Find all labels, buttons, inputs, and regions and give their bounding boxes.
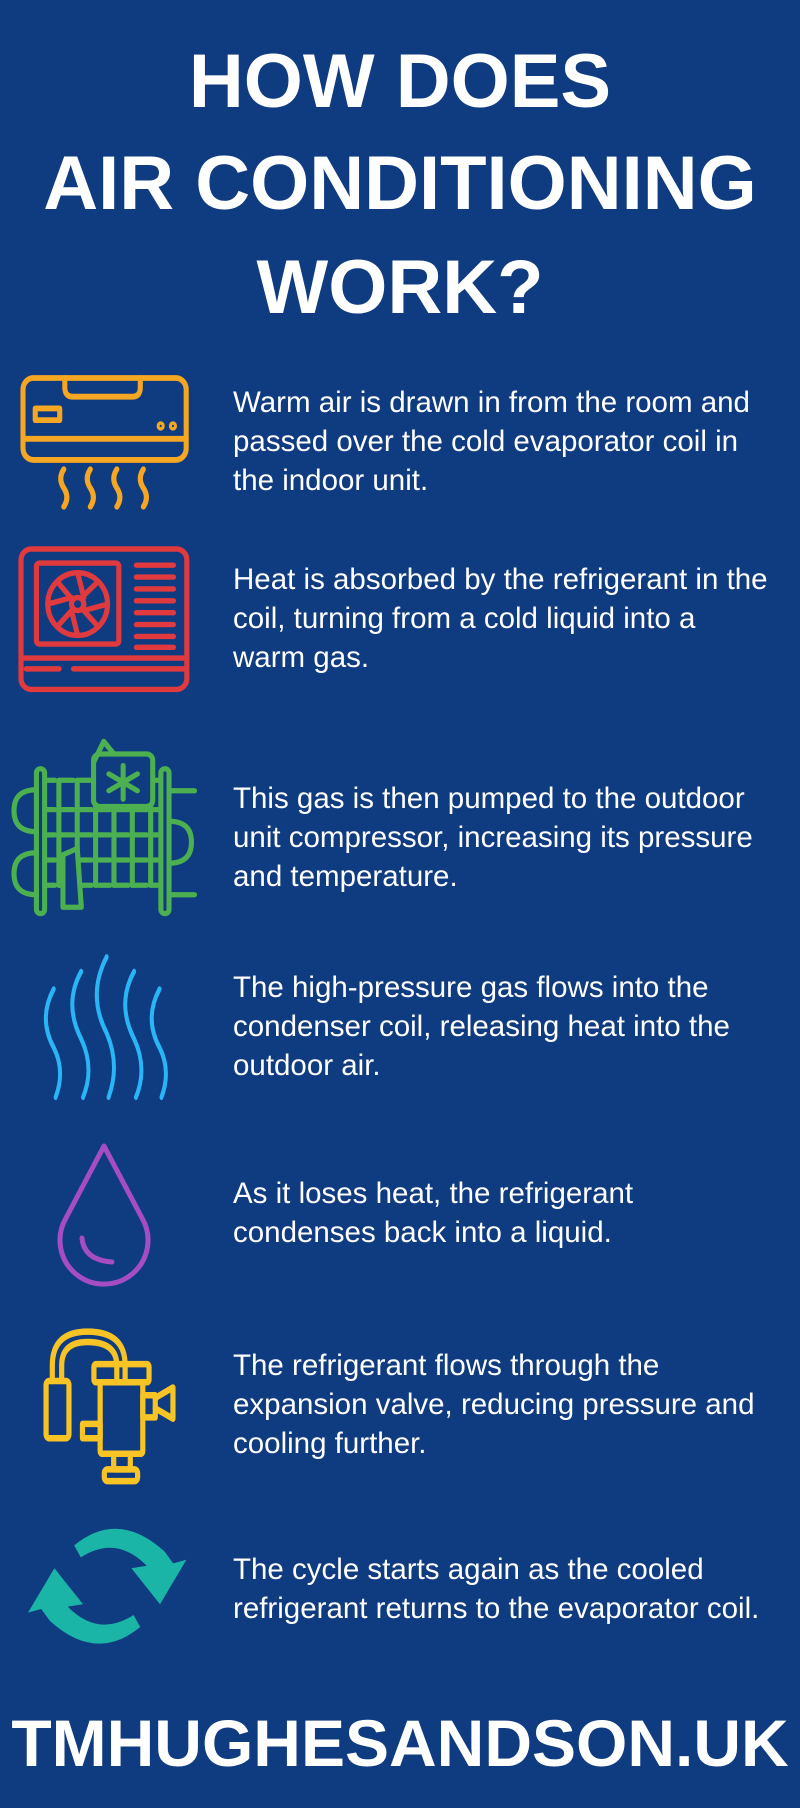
text: step 3 [233, 782, 753, 893]
icon: compressor coil [14, 741, 195, 914]
text: step 6 [233, 1349, 754, 1460]
text: step 1: the indoor unit. [233, 464, 428, 497]
icon: expansion valve [46, 1332, 173, 1481]
title [43, 39, 757, 330]
footer: website: TMHUGHESANDSON.UK [11, 1706, 789, 1780]
text: step 3: This gas is then pumped to the outdoor [233, 782, 745, 815]
text: step 1 [233, 386, 750, 497]
text: step 4 [233, 971, 730, 1082]
text: step 4: outdoor air. [233, 1049, 381, 1082]
title: HOW DOES [189, 39, 611, 124]
text: step 1: passed over the cold evaporator coil in [233, 425, 738, 458]
text: step 3: unit compressor, increasing its pressure [233, 821, 753, 854]
title: WORK? [256, 245, 544, 330]
text: step 2: coil, turning from a cold liquid into a [233, 602, 695, 635]
text: step 5: condenses back into a liquid. [233, 1216, 612, 1249]
icon: outdoor unit [21, 549, 187, 689]
text: step 1: Warm air is drawn in from the room and [233, 386, 750, 419]
text: step 6: The refrigerant flows through the [233, 1349, 659, 1382]
text: step 2: warm gas. [233, 641, 369, 674]
text: step 4: The high-pressure gas flows into the [233, 971, 709, 1004]
icon: droplet [60, 1146, 148, 1284]
text: step 4: condenser coil, releasing heat into the [233, 1010, 730, 1043]
text: step 7: The cycle starts again as the cooled [233, 1553, 704, 1586]
text: step 7 [233, 1553, 759, 1625]
text: step 2: Heat is absorbed by the refrigerant in the [233, 563, 768, 596]
text: step 2 [233, 563, 768, 674]
title: AIR CONDITIONING [43, 141, 757, 226]
text: step 7: refrigerant returns to the evaporator coil. [233, 1592, 759, 1625]
text: step 3: and temperature. [233, 860, 458, 893]
icon: cycle arrows [28, 1529, 186, 1644]
text: step 6: cooling further. [233, 1427, 427, 1460]
text: step 5: As it loses heat, the refrigerant [233, 1177, 633, 1210]
icon: heat waves [46, 957, 166, 1097]
icon: indoor AC unit [23, 378, 186, 507]
text: step 5 [233, 1177, 633, 1249]
text: step 6: expansion valve, reducing pressure and [233, 1388, 754, 1421]
